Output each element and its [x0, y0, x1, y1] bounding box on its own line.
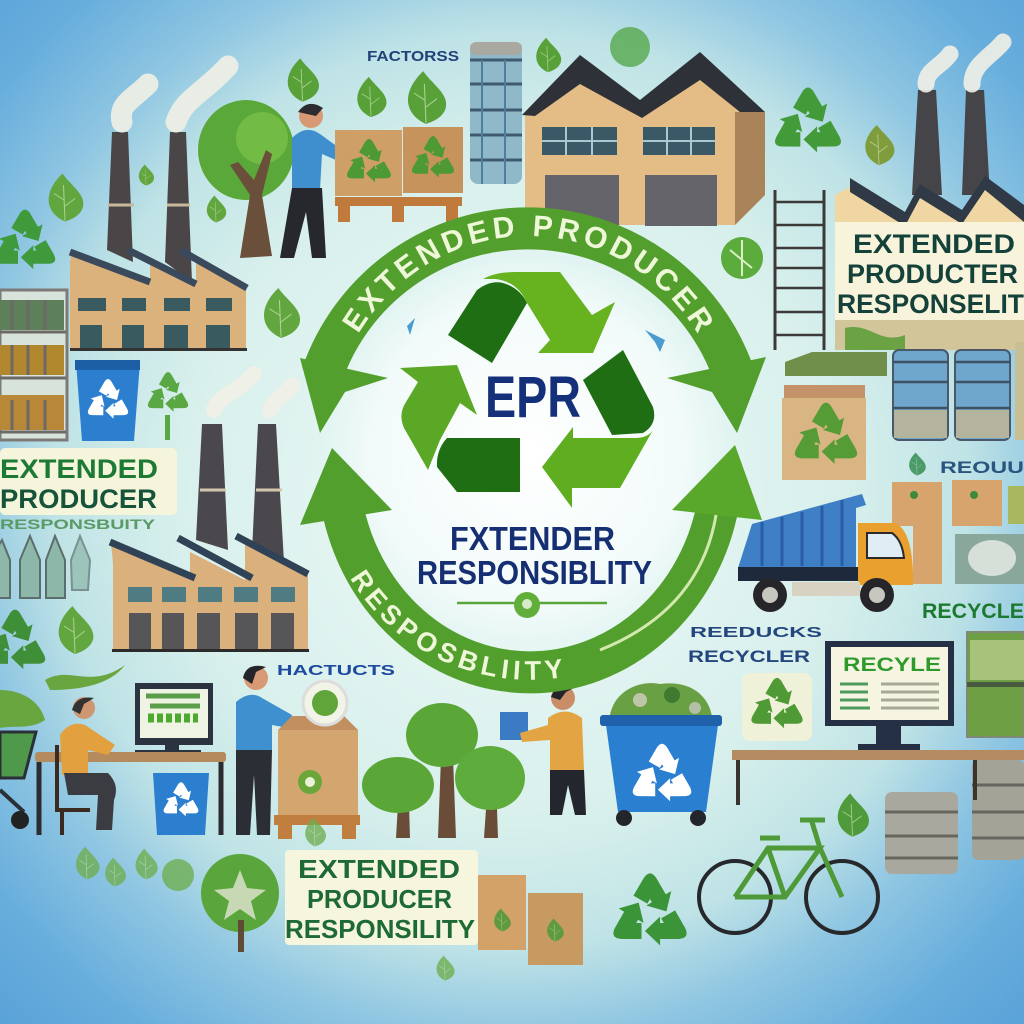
recycling bin: under desk	[153, 773, 209, 835]
bicycle	[699, 820, 878, 933]
tree: top left	[198, 100, 294, 258]
label: reeducks recycler	[688, 624, 822, 666]
recycle card	[742, 673, 812, 741]
bottles	[0, 536, 90, 598]
desk: right	[732, 750, 1024, 805]
small blue accents	[407, 318, 665, 352]
storage tank	[470, 42, 522, 184]
central recycling symbol	[400, 272, 654, 508]
monitor: recycle: RECYLE	[843, 655, 941, 676]
bottom arc label: RESPOSBLIITY	[350, 569, 562, 680]
label panel: bottom: PRODUCER	[307, 884, 452, 914]
person carrying box	[280, 104, 342, 258]
label: factories: FACTORSS	[367, 48, 459, 65]
foliage: top	[288, 27, 650, 124]
factory: middle left	[110, 374, 309, 652]
storage tanks	[893, 342, 1024, 440]
barrels	[885, 760, 1024, 874]
sign text: top right: EXTENDED	[853, 229, 1015, 259]
top arc arrow	[300, 207, 802, 458]
green tank	[967, 632, 1024, 737]
centre subtitle	[417, 520, 652, 591]
stacked boxes: right	[892, 480, 1024, 584]
label panel: bottom	[285, 850, 478, 945]
label panel: bottom: EXTENDED	[298, 854, 460, 884]
recycling box: right	[782, 385, 866, 480]
label: reeducks recycler: REEDUCKS	[690, 624, 822, 641]
label panel: left: RESPONSBUITY	[0, 516, 156, 532]
recycle icon: top right	[766, 88, 848, 160]
leaf: right of arc	[721, 237, 763, 279]
leaves: upper left	[49, 164, 300, 654]
shopping cart	[0, 732, 36, 829]
recycling bin: left	[75, 360, 140, 441]
factory: top right with sign	[835, 42, 1024, 350]
sign text: top right: RESPONSELIT	[837, 289, 1024, 319]
leaf cluster: top right	[865, 125, 894, 165]
foliage: lower right	[838, 793, 869, 837]
boxes on pallet	[335, 127, 463, 222]
top arc label: EXTENDED PRODUCER	[342, 216, 712, 334]
sign text: top right	[837, 229, 1024, 319]
star tree	[201, 854, 279, 952]
centre divider badge	[457, 592, 607, 618]
bottom arc arrow	[300, 445, 762, 694]
seated person	[57, 697, 116, 835]
trees: bottom centre	[362, 703, 525, 838]
label panel: left	[0, 448, 177, 532]
person with tablet	[500, 686, 586, 815]
label: reeducks recycler: RECYCLER	[688, 647, 810, 666]
label panel: left: EXTENDED	[0, 454, 158, 484]
central glow	[303, 227, 753, 677]
recycling bin with waste	[600, 683, 722, 826]
product shelves	[0, 290, 67, 440]
label: reduce: REOUU	[940, 458, 1024, 477]
recycle tree icon	[142, 372, 192, 440]
label panel: bottom: RESPONSILITY	[285, 914, 475, 944]
centre subtitle: FXTENDER	[450, 520, 615, 557]
foliage: bottom left	[76, 818, 455, 980]
recycle icon: lower left	[0, 610, 52, 676]
label: recycle green: RECYCLE	[922, 600, 1024, 623]
person with box	[236, 666, 360, 839]
centre title: EPR: EPR	[485, 365, 581, 430]
desk with computer and worker	[35, 683, 226, 835]
label: reduce	[909, 452, 1024, 477]
factory: top left	[70, 66, 247, 351]
recycle icon: left	[0, 210, 62, 276]
centre subtitle: RESPONSIBLITY	[417, 554, 652, 591]
ladder	[775, 190, 824, 350]
foliage strip: lower left	[0, 665, 125, 728]
shelf with plants	[785, 352, 887, 376]
boxes: bottom	[478, 875, 583, 965]
sign text: top right: PRODUCTER	[847, 259, 1018, 289]
recycle icon: bottom	[603, 873, 694, 954]
dump truck	[738, 494, 913, 612]
label panel: left: PRODUCER	[0, 484, 157, 514]
label: hactucts: HACTUCTS	[277, 662, 395, 679]
monitor: recycle	[825, 641, 954, 750]
warehouse: top centre	[522, 52, 765, 226]
